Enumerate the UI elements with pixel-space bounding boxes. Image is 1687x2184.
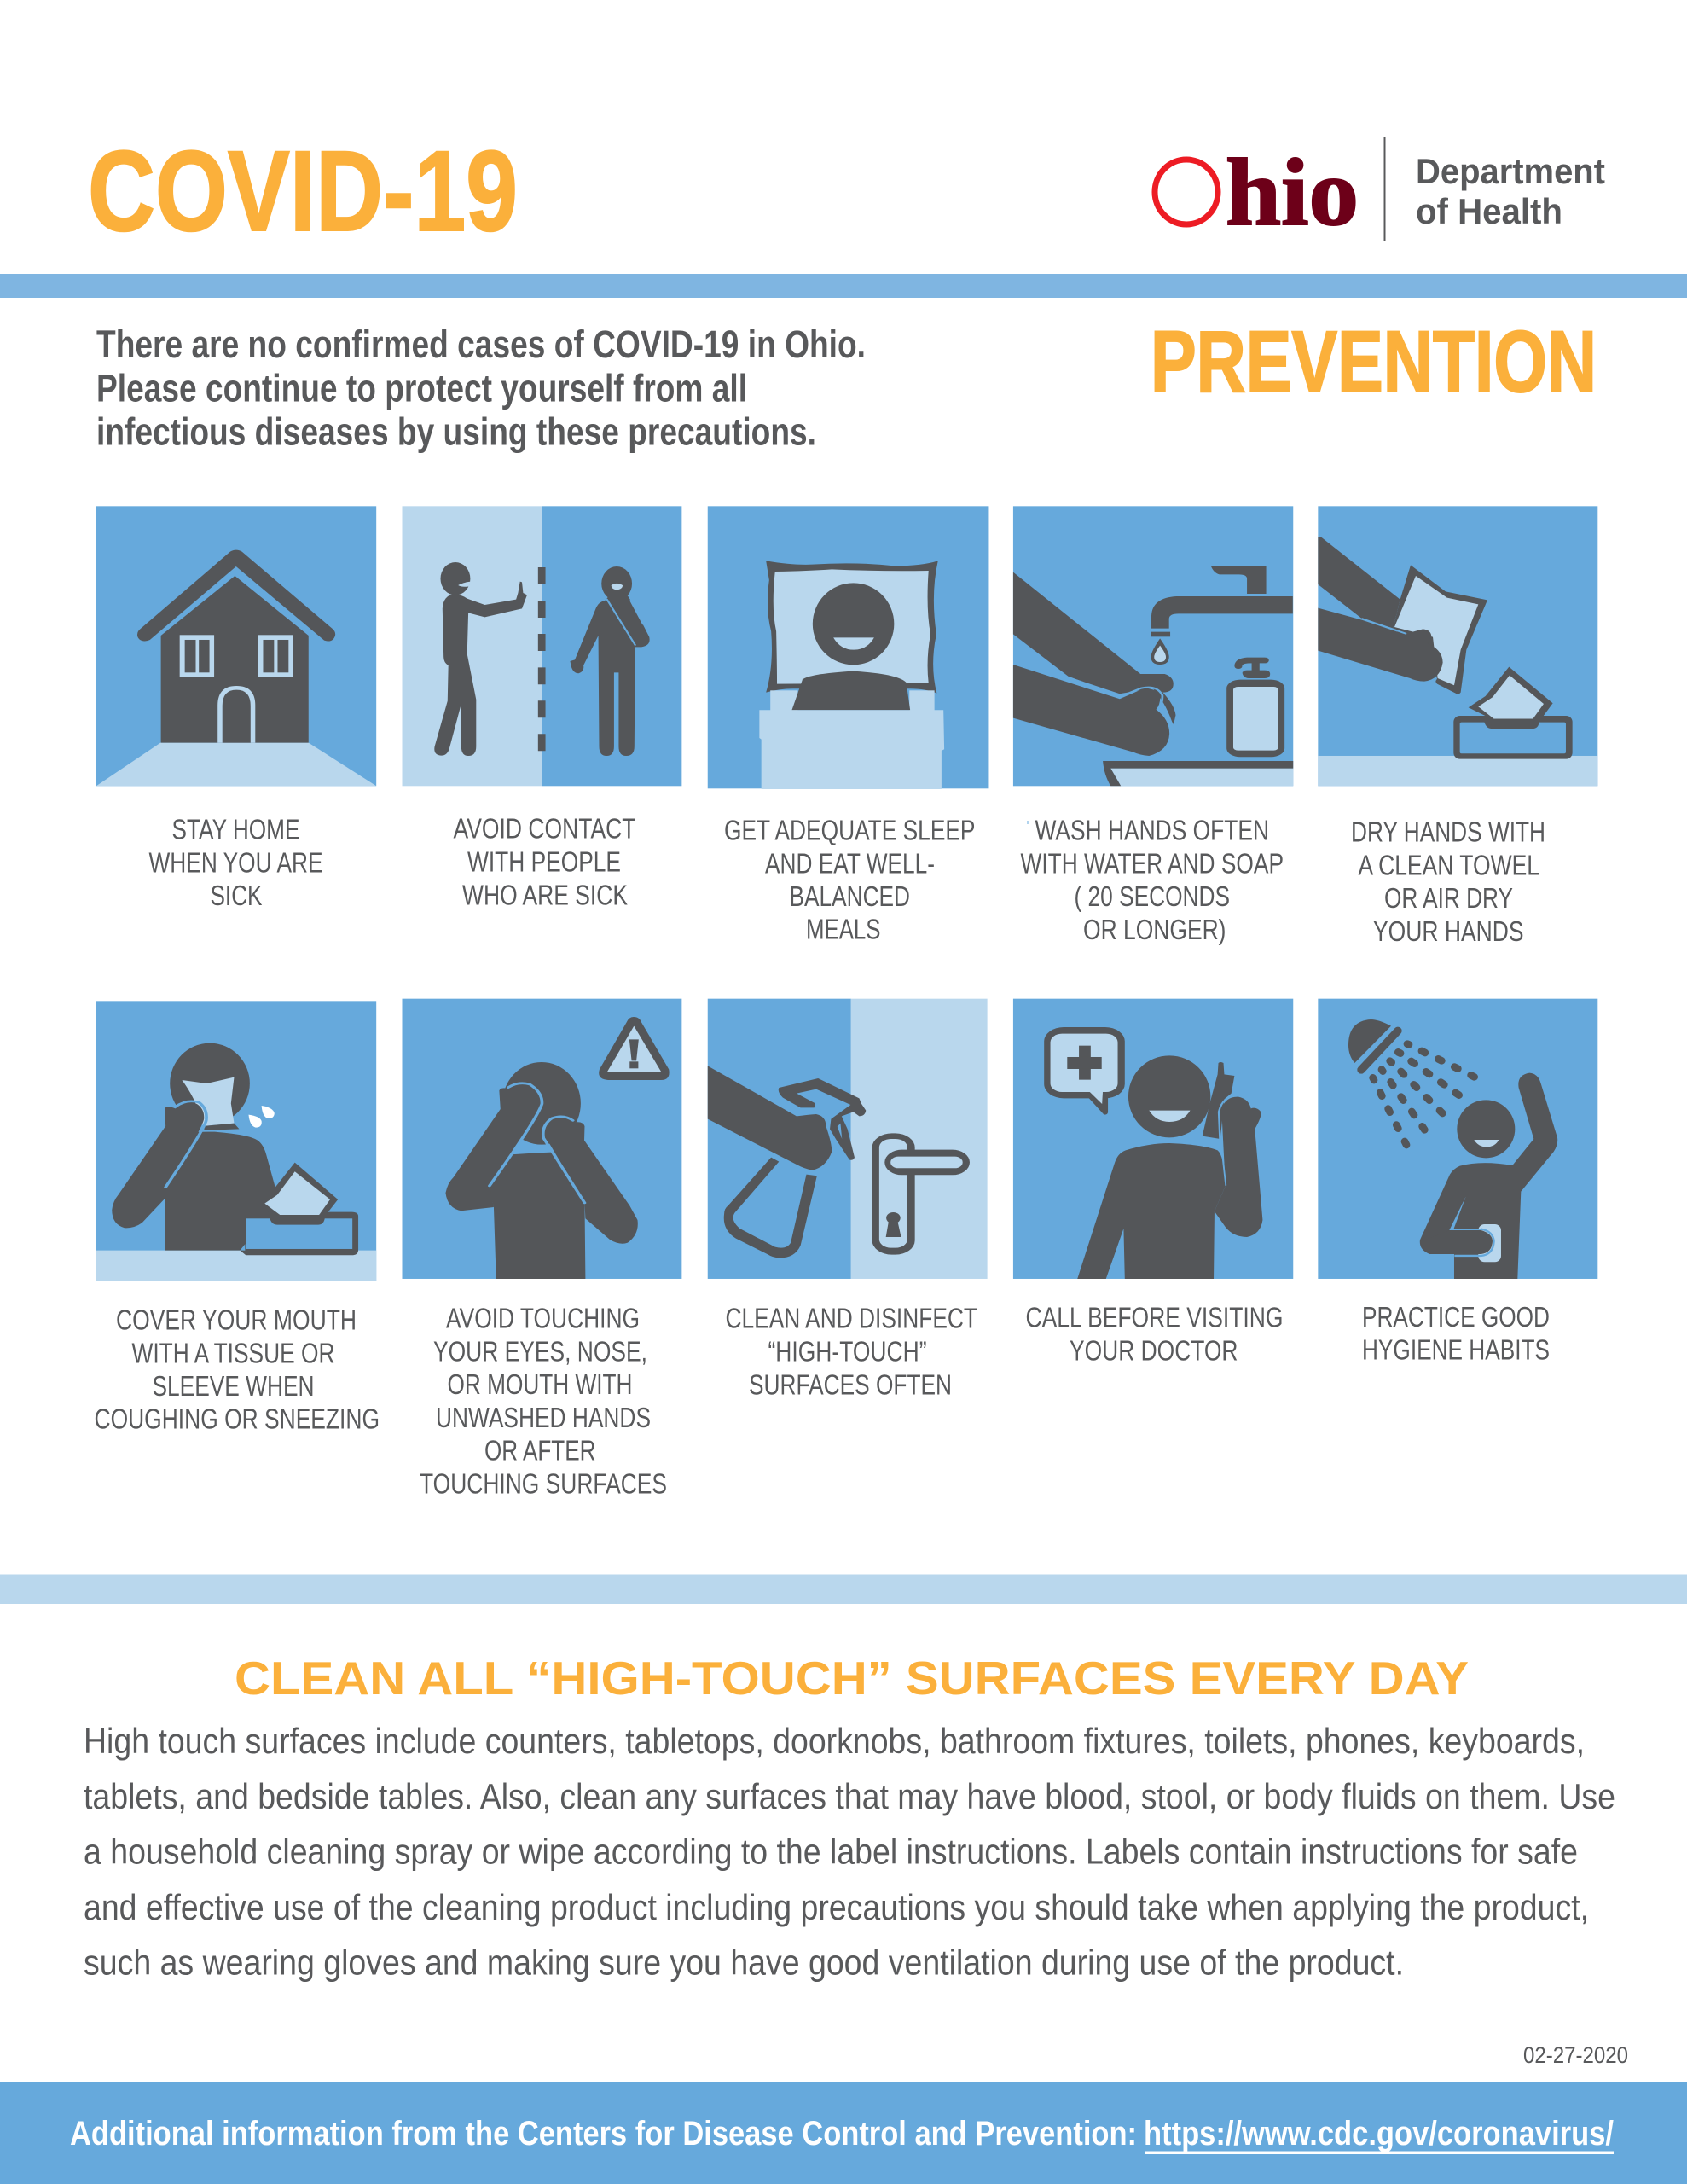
caption: WITH A TISSUE OR (131, 1337, 334, 1368)
logo department text: of Health (1416, 191, 1562, 231)
caption: AVOID TOUCHING (446, 1303, 640, 1334)
caption: WHEN YOU ARE (148, 846, 322, 878)
date stamp: 02-27-2020 (1523, 2042, 1628, 2068)
caption: SLEEVE WHEN (152, 1370, 314, 1402)
panel: clean and disinfect (708, 999, 988, 1400)
caption: WITH PEOPLE (467, 846, 621, 878)
caption (454, 813, 636, 911)
logo department text (1416, 151, 1605, 231)
caption: TOUCHING SURFACES (420, 1468, 667, 1500)
footer link: https://www.cdc.gov/coronavirus/ (1144, 2115, 1614, 2152)
icon: hands under faucet with soap (1013, 506, 1293, 786)
caption: AND EAT WELL- (765, 847, 935, 879)
caption: A CLEAN TOWEL (1358, 849, 1539, 880)
title: COVID-19 (88, 128, 518, 255)
body text: high touch surfaces: such as wearing gloves and making sure you have good ventilation during use of the product. (84, 1943, 1404, 1983)
caption (94, 1304, 380, 1434)
caption (1351, 816, 1545, 947)
caption: COVER YOUR MOUTH (116, 1304, 357, 1335)
panel: sleep (708, 506, 988, 945)
caption (1020, 814, 1284, 945)
intro text: There are no confirmed cases of COVID-19 in Ohio. (96, 322, 866, 366)
caption: OR LONGER) (1083, 914, 1226, 945)
caption: YOUR HANDS (1373, 915, 1523, 947)
panel: stay home (96, 506, 376, 911)
panel: dry hands (1318, 506, 1597, 947)
intro text: infectious diseases by using these precautions. (96, 410, 816, 454)
caption: HYGIENE HABITS (1362, 1334, 1550, 1366)
heading: clean all high-touch surfaces: CLEAN ALL “HIGH-TOUCH” SURFACES EVERY DAY (235, 1652, 1469, 1705)
caption: CLEAN AND DISINFECT (725, 1303, 977, 1334)
icon: two people separated by dashed line (402, 506, 681, 786)
panel: avoid contact (402, 506, 681, 911)
caption: WHO ARE SICK (462, 880, 628, 911)
caption: ( 20 SECONDS (1075, 880, 1230, 912)
icon: person in bed (708, 506, 988, 789)
panel: avoid touching face (402, 999, 681, 1500)
caption: UNWASHED HANDS (436, 1402, 651, 1433)
caption (420, 1303, 667, 1500)
intro text: Please continue to protect yourself from all (96, 367, 747, 410)
caption: BALANCED (790, 880, 910, 912)
caption: MEALS (806, 914, 880, 945)
icon: spray bottle and door handle (708, 999, 988, 1279)
icon: hands taking paper towel (1318, 506, 1597, 786)
logo department text: Department (1416, 151, 1605, 191)
panel: wash hands (1013, 506, 1293, 945)
icon: person coughing into tissue (96, 1001, 376, 1281)
body text: high touch surfaces (84, 1721, 1615, 1983)
icon: person showering (1318, 999, 1597, 1279)
panel: cover your mouth (94, 1001, 380, 1434)
top blue band (0, 274, 1687, 298)
caption: WASH HANDS OFTEN (1035, 814, 1269, 845)
caption: SURFACES OFTEN (749, 1368, 952, 1400)
footer band (0, 2082, 1687, 2184)
caption (1362, 1301, 1550, 1366)
caption (724, 814, 976, 945)
icon: house (96, 506, 376, 786)
caption: AVOID CONTACT (454, 813, 636, 845)
icon: person on phone with medical speech bubble (1013, 999, 1293, 1279)
caption: YOUR DOCTOR (1070, 1334, 1238, 1366)
footer text: Additional information from the Centers for Disease Control and Prevention: (70, 2115, 1137, 2152)
caption: CALL BEFORE VISITING (1025, 1302, 1283, 1333)
logo letters hio: hio (1226, 140, 1359, 246)
panel: call doctor (1013, 999, 1293, 1366)
logo letter O (1155, 160, 1218, 224)
caption: DRY HANDS WITH (1351, 816, 1545, 848)
caption: OR MOUTH WITH (447, 1368, 633, 1400)
caption (148, 813, 322, 911)
caption: SICK (210, 880, 263, 911)
intro text (96, 322, 866, 454)
caption: OR AFTER (484, 1435, 595, 1467)
caption: WITH WATER AND SOAP (1020, 847, 1284, 879)
caption: YOUR EYES, NOSE, (433, 1335, 647, 1367)
caption: “HIGH-TOUCH” (768, 1335, 926, 1367)
caption (1025, 1302, 1283, 1366)
caption (725, 1303, 977, 1400)
icon: person touching face with warning sign (402, 999, 681, 1279)
panel: hygiene (1318, 999, 1597, 1366)
light blue divider band (0, 1575, 1687, 1604)
caption: PRACTICE GOOD (1362, 1301, 1550, 1333)
caption: OR AIR DRY (1384, 882, 1513, 914)
caption: STAY HOME (172, 813, 300, 845)
logo: Ohio Department of Health (1155, 136, 1605, 246)
caption: GET ADEQUATE SLEEP (724, 814, 976, 845)
caption: COUGHING OR SNEEZING (94, 1403, 380, 1434)
